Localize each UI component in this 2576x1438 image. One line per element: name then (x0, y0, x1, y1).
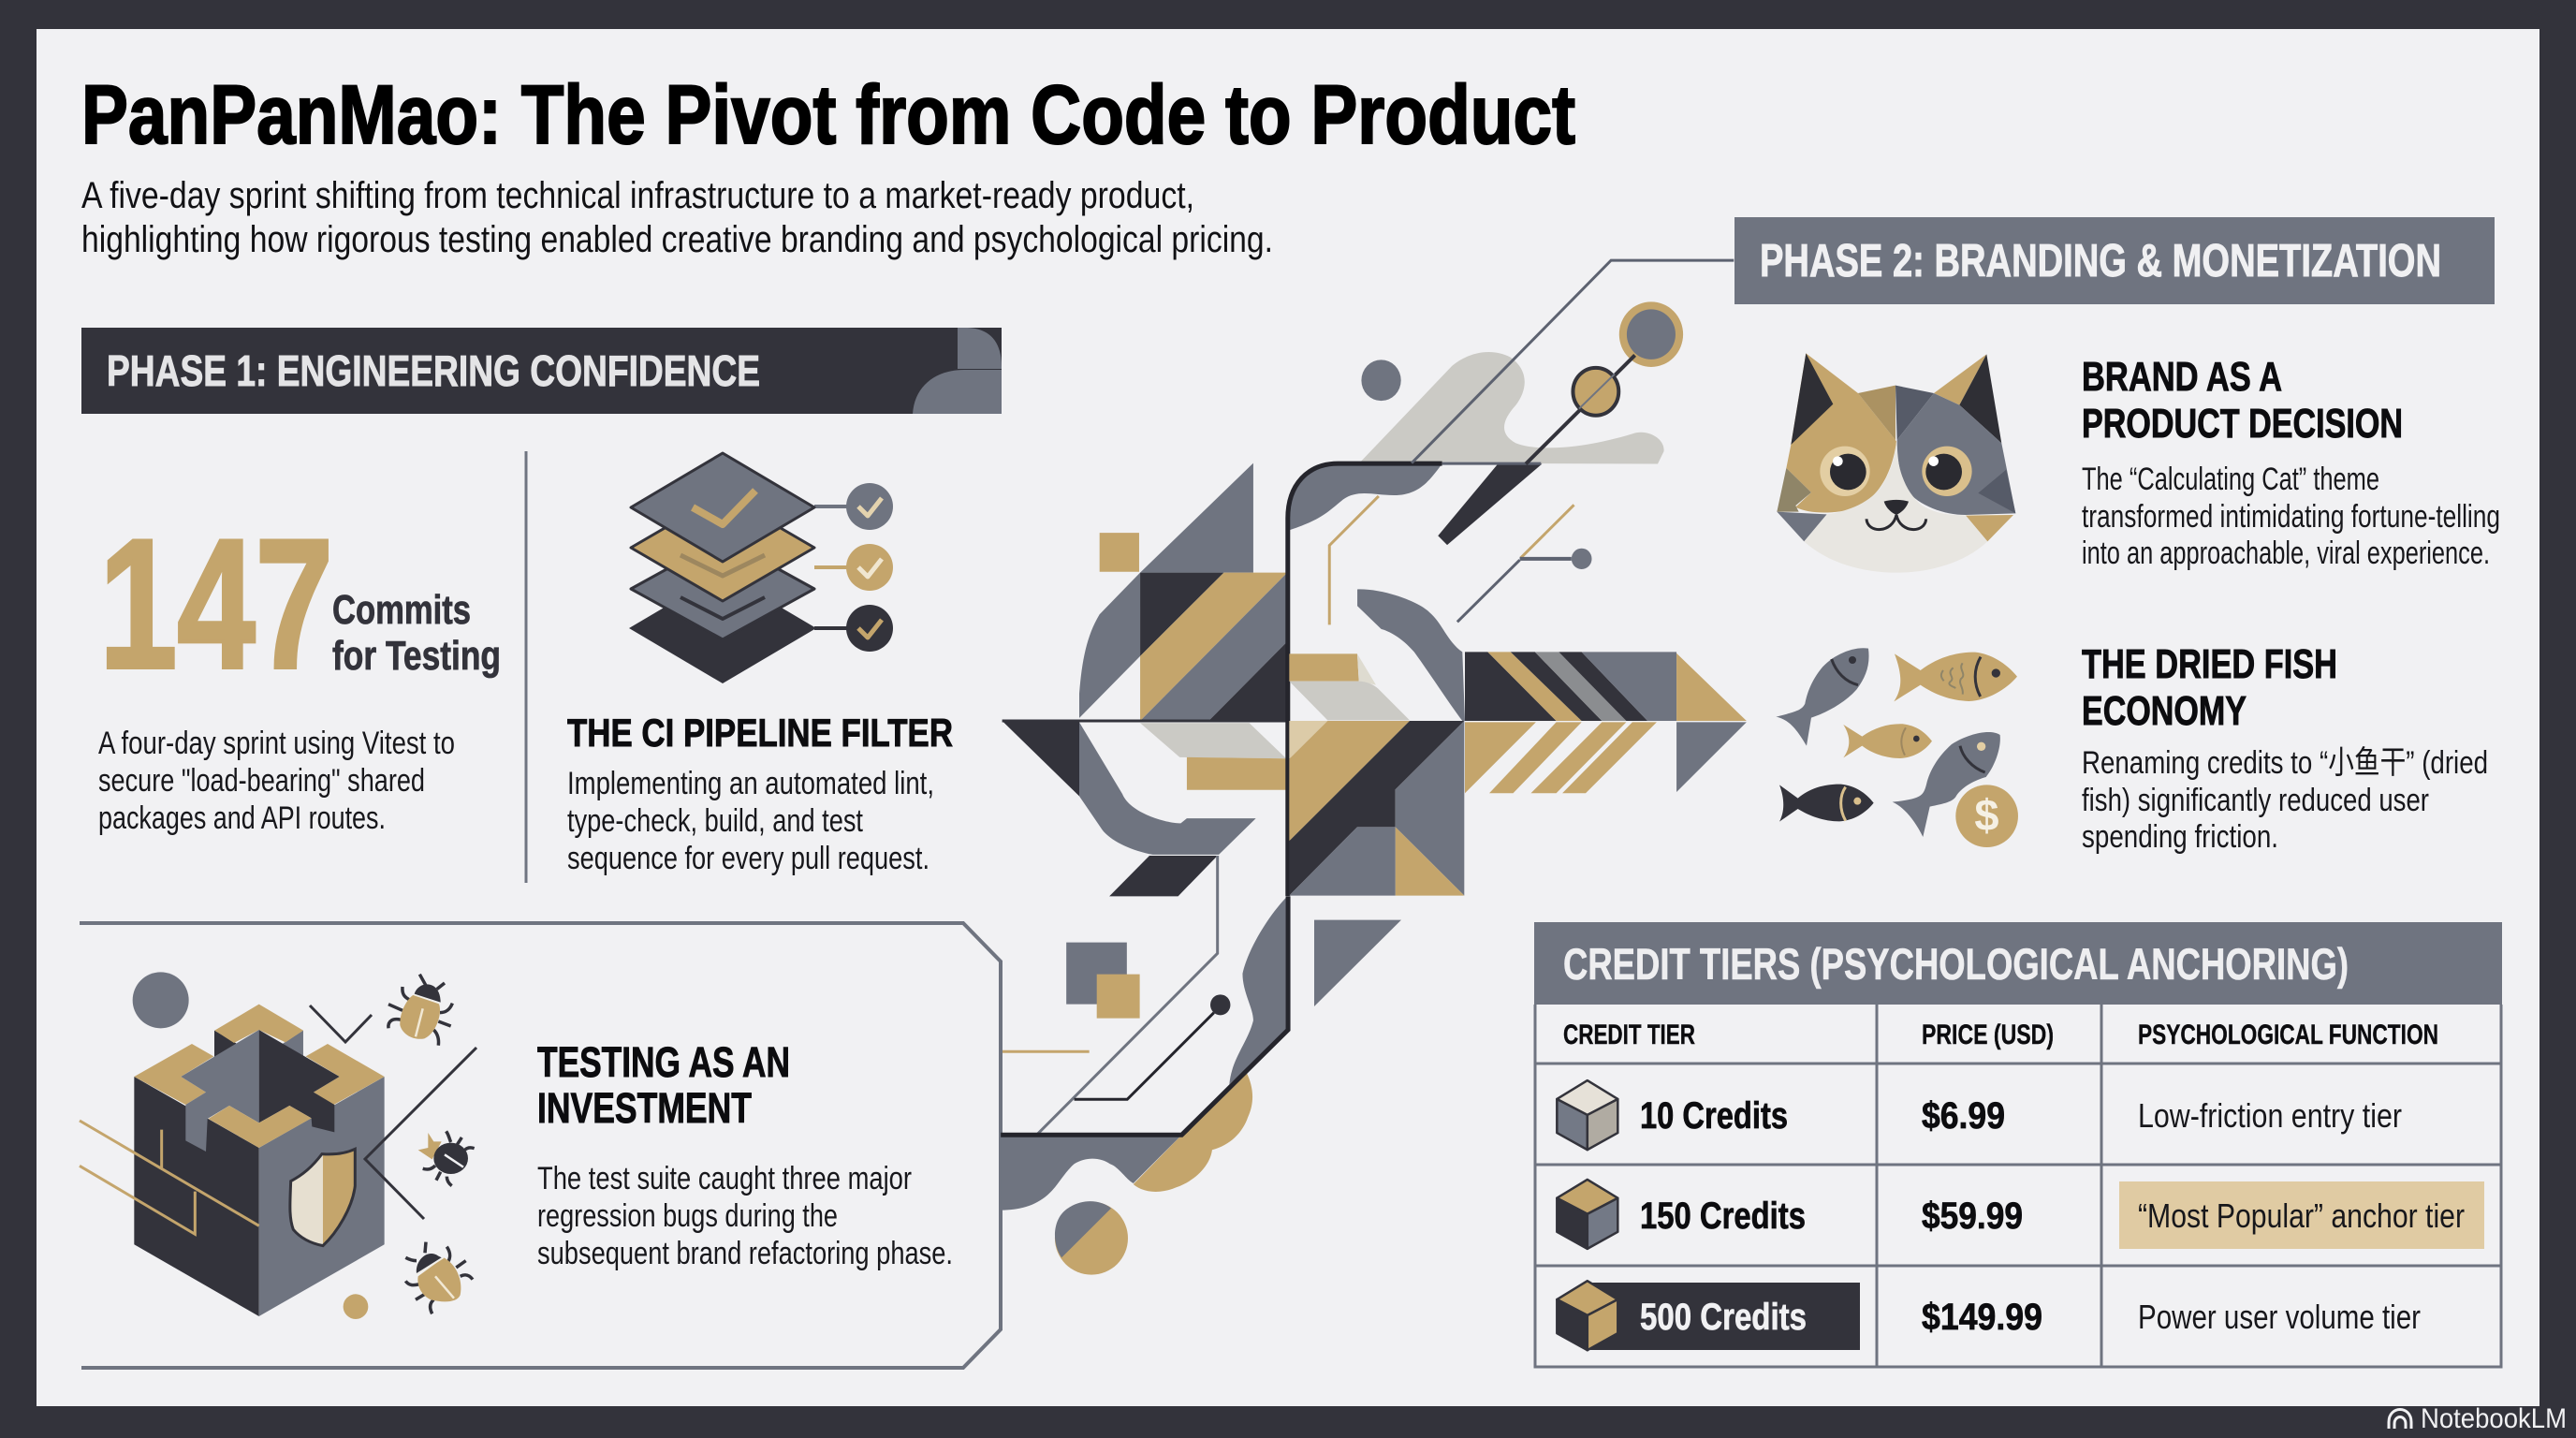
title: PanPanMao: The Pivot from Code to Product (81, 67, 1575, 161)
central geometric artwork: lower part (1001, 856, 1401, 1275)
row: 150 credits: 150 Credits (1640, 1196, 1806, 1237)
icon: fortified cube with shield (80, 972, 385, 1319)
dried fish description: spending friction. (2082, 819, 2278, 855)
icon: dried fish and coin (1776, 648, 2018, 847)
column headings: PSYCHOLOGICAL FUNCTION (2138, 1020, 2438, 1050)
panel: testing as an investment (80, 923, 1001, 1368)
icon: deflection lines (310, 1005, 476, 1219)
row: 10 credits: 10 Credits (1640, 1095, 1788, 1137)
brand description: The “Calculating Cat” theme (2082, 462, 2379, 497)
icon: bug bottom (405, 1242, 473, 1313)
row: 500 credits: $149.99 (1922, 1297, 2042, 1338)
watermark: NotebookLM: NotebookLM (2421, 1403, 2567, 1434)
panel: phase 2 header (1734, 217, 2495, 304)
stat description: packages and API routes. (98, 800, 386, 836)
row: 10 credits (1557, 1080, 2402, 1150)
row: 500 credits: 500 Credits (1640, 1297, 1807, 1338)
icon: dollar sign: $ (1974, 790, 1999, 840)
column headings: PRICE (USD) (1922, 1020, 2054, 1050)
panel: phase 1 header (81, 328, 1002, 414)
testing description: regression bugs during the (537, 1198, 838, 1234)
dried fish description (2082, 745, 2488, 855)
heading: brand as a product decision (2082, 354, 2403, 447)
brand description (2082, 462, 2500, 571)
CI pipeline description: Implementing an automated lint, (567, 766, 934, 801)
icon: bug top (388, 975, 452, 1046)
CI pipeline description (567, 766, 934, 876)
row: 150 credits: $59.99 (1922, 1196, 2023, 1237)
subtitle: A five-day sprint shifting from technical infrastructure to a market-ready product, (81, 175, 1194, 216)
column headings: CREDIT TIER (1563, 1020, 1695, 1050)
testing description (537, 1161, 953, 1271)
icon: calculating cat (1777, 353, 2015, 573)
stat description (98, 726, 455, 836)
stat: 147 commits: for Testing (332, 633, 501, 679)
testing description: The test suite caught three major (537, 1161, 912, 1196)
heading: CI pipeline filter: THE CI PIPELINE FILTER (567, 711, 953, 755)
heading: the dried fish economy (2082, 641, 2337, 734)
heading: brand as a product decision: PRODUCT DECISION (2082, 401, 2403, 447)
testing description: subsequent brand refactoring phase. (537, 1236, 953, 1271)
stat: 147 commits: 147 (99, 501, 333, 707)
heading: testing as an investment: INVESTMENT (537, 1084, 752, 1132)
CI pipeline description: type-check, build, and test (567, 803, 863, 839)
heading: the dried fish economy: THE DRIED FISH (2082, 641, 2337, 687)
dried fish description: fish) significantly reduced user (2082, 783, 2429, 818)
subtitle (81, 175, 1273, 260)
row: 10 credits: Low-friction entry tier (2138, 1096, 2402, 1135)
dried fish description: Renaming credits to “小鱼干” (dried (2082, 745, 2488, 781)
central geometric artwork: upper part (1003, 260, 1747, 896)
heading: the dried fish economy: ECONOMY (2082, 688, 2247, 734)
stat description: A four-day sprint using Vitest to (98, 726, 455, 761)
row: 150 credits (1557, 1180, 2484, 1249)
row: 500 credits (1557, 1281, 2421, 1350)
table: credit tiers (1534, 922, 2502, 1367)
subtitle: highlighting how rigorous testing enabled creative branding and psychological pricing. (81, 219, 1273, 260)
icon: bug middle (418, 1131, 475, 1186)
table header band: CREDIT TIERS (PSYCHOLOGICAL ANCHORING) (1563, 939, 2349, 989)
central geometric artwork: middle blocks (1289, 653, 1464, 896)
heading: testing as an investment: TESTING AS AN (537, 1038, 790, 1086)
CI pipeline description: sequence for every pull request. (567, 841, 929, 876)
heading: brand as a product decision: BRAND AS A (2082, 354, 2282, 400)
stat: 147 commits: Commits (332, 587, 471, 633)
heading: testing as an investment (537, 1038, 790, 1132)
panel: phase 1 header: PHASE 1: ENGINEERING CONFIDENCE (107, 346, 760, 395)
row: 500 credits: Power user volume tier (2138, 1298, 2421, 1336)
table header band (1534, 922, 2502, 1005)
column headings (1563, 1020, 2438, 1050)
row: 10 credits: $6.99 (1922, 1095, 2005, 1137)
icon: CI pipeline layers (629, 453, 893, 683)
row: 150 credits: “Most Popular” anchor tier (2138, 1196, 2465, 1235)
stat description: secure "load-bearing" shared (98, 763, 425, 799)
